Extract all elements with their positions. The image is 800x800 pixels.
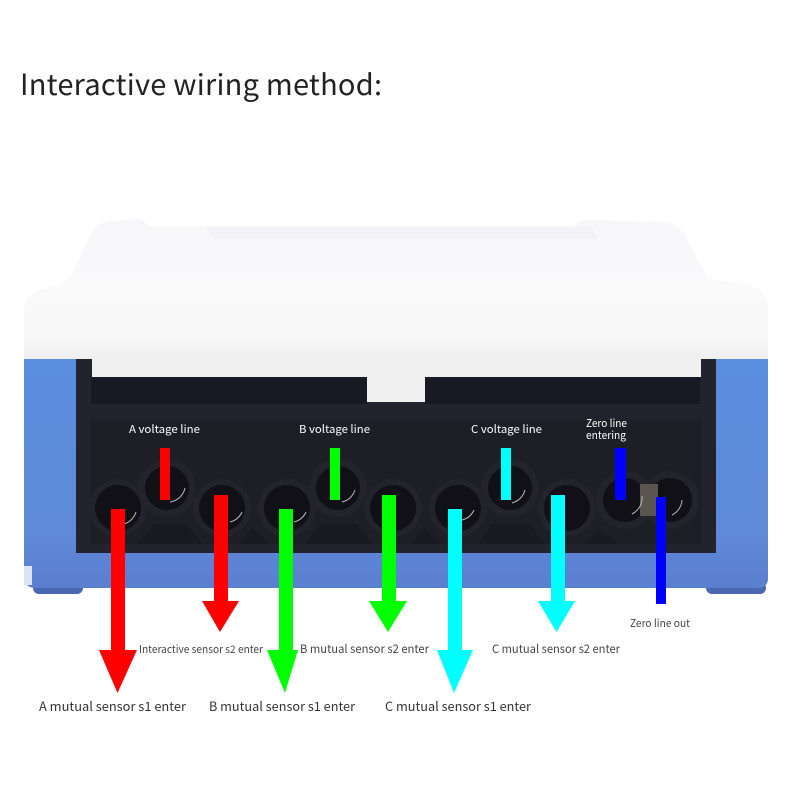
arrow: interactive s2 bbox=[202, 495, 239, 632]
label: zero line out: Zero line out bbox=[630, 616, 690, 631]
title: Interactive wiring method: bbox=[20, 62, 382, 104]
display recess bbox=[205, 227, 598, 239]
marker: C voltage bbox=[501, 448, 511, 500]
marker: A voltage bbox=[160, 448, 170, 500]
label: A voltage line: A voltage line bbox=[129, 421, 200, 437]
arrow: C s2 bbox=[538, 495, 575, 632]
marker: zero line entering bbox=[615, 448, 626, 500]
zero bridge plate bbox=[640, 484, 658, 516]
label: C voltage line: C voltage line bbox=[471, 421, 542, 437]
label: zero line entering: Zero line bbox=[586, 416, 627, 431]
blue base bbox=[24, 355, 768, 588]
terminal lobes bbox=[89, 459, 699, 537]
arrow: B s1 bbox=[267, 509, 298, 693]
black terminal panel bbox=[76, 359, 716, 553]
white front cover bbox=[24, 285, 768, 359]
hole highlights bbox=[124, 488, 682, 524]
arrow: C s1 bbox=[437, 509, 473, 693]
label: B mutual s2: B mutual sensor s2 enter bbox=[300, 641, 430, 657]
label: C mutual s2: C mutual sensor s2 enter bbox=[492, 641, 621, 657]
marker: B voltage bbox=[330, 448, 340, 500]
label: A mutual s1: A mutual sensor s1 enter bbox=[39, 696, 186, 715]
label: zero line entering: entering bbox=[586, 428, 626, 443]
device feet bbox=[33, 582, 766, 594]
upper channel bbox=[91, 377, 700, 404]
corner clip bbox=[24, 566, 32, 585]
arrow: B s2 bbox=[369, 495, 407, 632]
terminal recess bbox=[90, 420, 702, 544]
base triangles bbox=[136, 524, 620, 544]
device: power meter rear view bbox=[24, 219, 768, 594]
cover flap bbox=[92, 359, 701, 402]
label: C mutual s1: C mutual sensor s1 enter bbox=[385, 696, 531, 715]
label: B voltage line: B voltage line bbox=[299, 421, 370, 437]
bar: zero line out bbox=[656, 497, 666, 604]
arrow: A s1 bbox=[99, 509, 137, 693]
label: B mutual s1: B mutual sensor s1 enter bbox=[209, 696, 355, 715]
label: interactive sensor s2: Interactive sensor s2 enter bbox=[139, 642, 264, 657]
terminal holes bbox=[95, 466, 692, 531]
upper housing bbox=[24, 219, 768, 340]
